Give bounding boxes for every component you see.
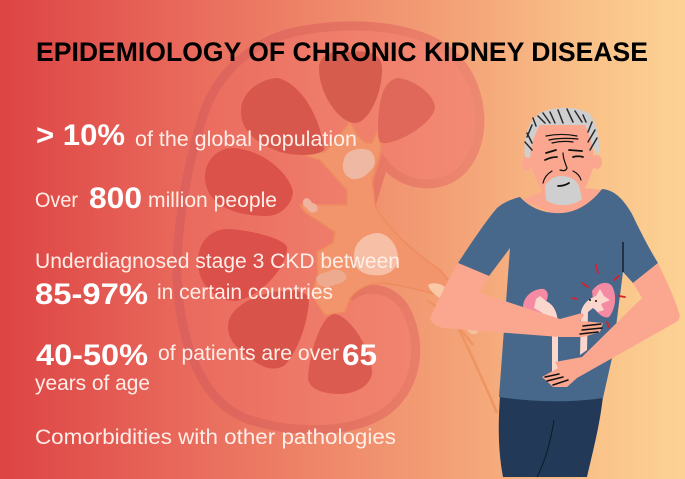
statistic: underdiagnosed stage 3: 85-97% <box>35 278 148 311</box>
urinary system <box>523 283 615 373</box>
shirt fold <box>622 242 624 272</box>
statistic: million people <box>35 182 277 215</box>
statistic: underdiagnosed stage 3: Underdiagnosed stage 3 CKD between <box>35 250 400 273</box>
statistic: patients over 65 <box>35 339 377 395</box>
title: EPIDEMIOLOGY OF CHRONIC KIDNEY DISEASE <box>36 37 648 67</box>
beard <box>545 176 582 205</box>
kidney outer body <box>177 26 480 430</box>
facial lines <box>543 134 583 183</box>
trouser crease <box>537 420 554 477</box>
ears <box>522 155 602 171</box>
renal sinus <box>300 122 470 315</box>
kidney pyramids <box>198 51 435 394</box>
right arm <box>542 263 680 387</box>
statistic: global population: of the global population <box>135 128 357 151</box>
trousers <box>499 396 603 477</box>
statistic: million people: 800 <box>89 182 142 215</box>
mouth <box>558 183 569 186</box>
statistic: million people: Over <box>35 189 78 212</box>
hair strokes <box>525 109 597 150</box>
statistic: global population <box>36 119 357 152</box>
man holding kidneys <box>430 108 680 477</box>
ureter <box>427 300 497 413</box>
statistic: patients over 65: 65 <box>342 339 377 372</box>
statistic: underdiagnosed stage 3 <box>35 250 400 311</box>
pain marks <box>572 265 625 327</box>
statistic: patients over 65: 40-50% <box>36 339 148 372</box>
face <box>530 125 594 196</box>
left arm <box>430 263 603 337</box>
statistic: million people: million people <box>148 189 277 212</box>
kidney illustration background <box>177 26 497 430</box>
statistic: global population: > 10% <box>36 119 125 152</box>
fingers <box>545 324 602 385</box>
statistic: comorbidities: Comorbidities with other pathologies <box>35 426 396 449</box>
statistic: underdiagnosed stage 3: in certain countries <box>157 281 333 304</box>
neck and upper chest <box>522 170 604 217</box>
kidney stones <box>303 149 479 334</box>
t-shirt <box>458 189 658 401</box>
hair <box>525 108 599 158</box>
statistic: patients over 65: of patients are over <box>158 342 339 365</box>
statistic: patients over 65: years of age <box>35 372 150 395</box>
